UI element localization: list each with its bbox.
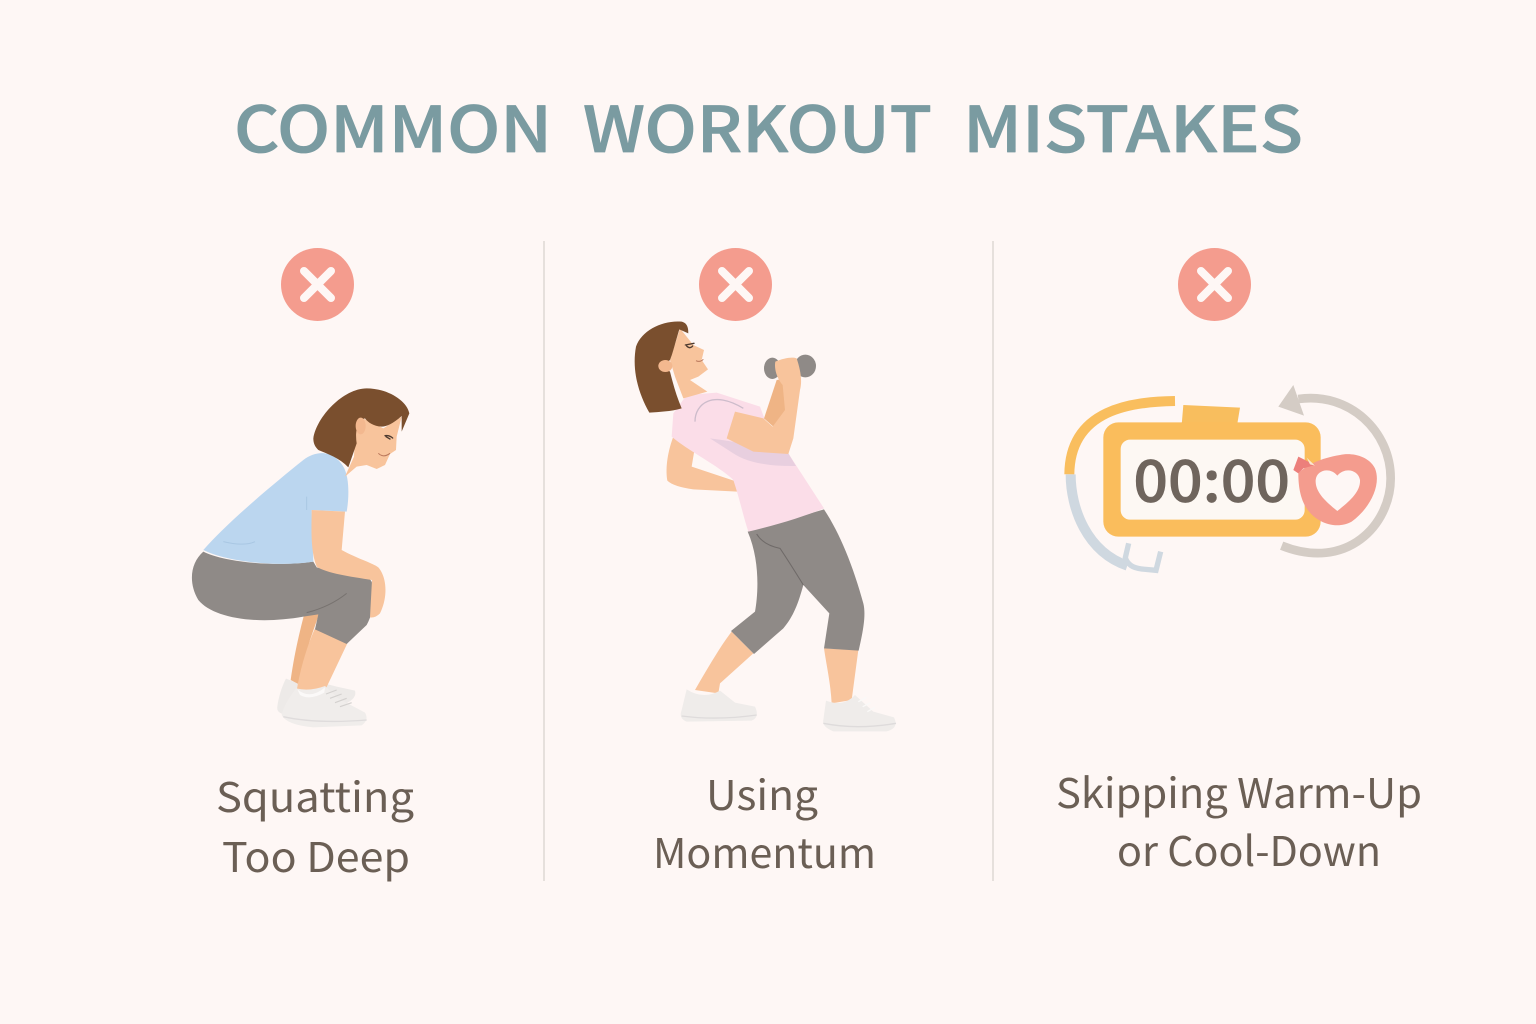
label: Skipping Warm-Up or Cool-Down: [1056, 760, 1422, 878]
arc: cool-down: [1071, 474, 1127, 566]
arc: warm-up: [1069, 401, 1175, 474]
cool-down hook: [1125, 543, 1161, 570]
icon: red X badge: [1178, 248, 1251, 321]
timer body: [1103, 422, 1321, 537]
hair: [313, 388, 409, 467]
front shoe: [282, 686, 367, 727]
title: COMMON: [234, 80, 552, 171]
panel: skipping warm-up or cool-down: [1056, 248, 1422, 878]
raised arm: [727, 358, 801, 454]
shoes: [681, 689, 896, 731]
icon: timer with heart and cycle arrows: [1069, 385, 1391, 570]
leggings: [731, 509, 864, 654]
shirt: [672, 393, 824, 532]
figure: woman swinging dumbbell with momentum: [635, 321, 896, 731]
label: Using Momentum: [653, 762, 876, 880]
arm and hand: [311, 510, 385, 617]
front leg: [297, 628, 347, 691]
cycle arrow: [1278, 385, 1391, 553]
title: WORKOUT: [583, 80, 932, 171]
neck and face: [345, 417, 402, 477]
timer readout: 00:00: [1133, 435, 1290, 519]
figure: woman squatting too deep: [192, 388, 409, 727]
panel: squatting too deep: [192, 248, 414, 884]
front leg: [695, 632, 753, 693]
heart badge: [1293, 454, 1377, 525]
timer clip: [1182, 405, 1240, 430]
label: Skipping Warm-Up or Cool-Down: or Cool-Down: [1117, 818, 1381, 878]
label: Squatting Too Deep: [216, 764, 414, 884]
icon: red X badge: [699, 248, 772, 321]
dumbbell: [764, 355, 816, 379]
label: Using Momentum: Momentum: [653, 820, 876, 880]
label: Squatting Too Deep: Squatting: [216, 764, 414, 824]
title: MISTAKES: [963, 80, 1303, 171]
title: [234, 80, 1303, 171]
back leg and shoe: [277, 613, 355, 715]
label: Squatting Too Deep: Too Deep: [222, 824, 410, 884]
label: Skipping Warm-Up or Cool-Down: Skipping Warm-Up: [1056, 760, 1422, 820]
panel: using momentum: [635, 248, 896, 880]
neck and face: [670, 328, 708, 398]
back arm: [667, 437, 737, 492]
rear leg: [824, 648, 858, 703]
icon: red X badge: [281, 248, 354, 321]
leggings: [192, 552, 374, 644]
shirt: [203, 453, 348, 564]
hair: [635, 321, 688, 413]
label: Using Momentum: Using: [706, 762, 818, 822]
